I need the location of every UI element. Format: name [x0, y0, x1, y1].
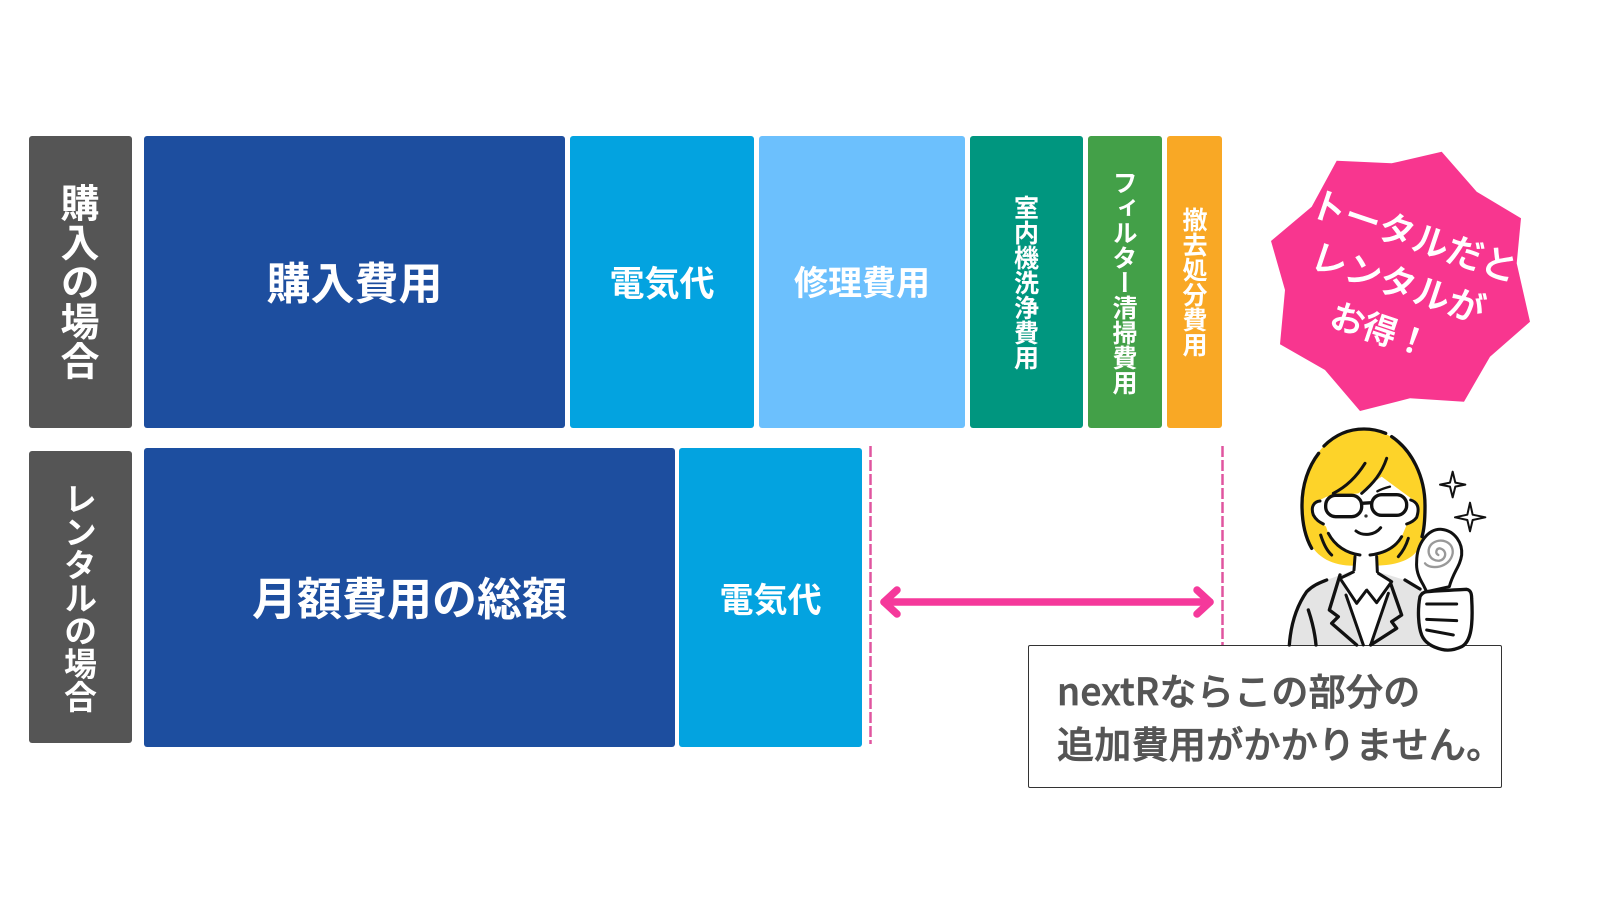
jacket	[1289, 570, 1427, 645]
row label: レンタルの場合: レンタルの場合	[56, 482, 104, 712]
badge: starburst	[1271, 152, 1530, 411]
row label: 購入の場合	[29, 136, 132, 428]
illustration: businesswoman with thumbs up	[1288, 427, 1486, 652]
dashed guide left	[869, 446, 872, 744]
segment: フィルター清掃費用	[1088, 136, 1162, 428]
badge: starburst: レンタルが	[1305, 228, 1492, 334]
segment: 電気代	[570, 136, 754, 428]
sparkles	[1440, 472, 1485, 531]
segment: 撤去処分費用: 撤去処分費用	[1177, 207, 1213, 357]
segment: 購入費用: 購入費用	[266, 248, 442, 312]
row label: レンタルの場合	[29, 451, 132, 743]
badge: starburst: お得！	[1325, 288, 1437, 367]
face and neck	[1312, 458, 1419, 589]
callout box: nextRならこの部分の	[1057, 662, 1421, 716]
segment: 修理費用	[759, 136, 965, 428]
hair	[1302, 429, 1425, 566]
badge: starburst: トータルだと	[1304, 175, 1525, 293]
segment: フィルター清掃費用: フィルター清掃費用	[1107, 170, 1143, 394]
segment: 電気代: 電気代	[609, 256, 714, 307]
segment: 室内機洗浄費用	[970, 136, 1083, 428]
segment: 修理費用: 修理費用	[794, 256, 930, 305]
row label: 購入の場合: 購入の場合	[52, 183, 108, 381]
segment: 月額費用の総額	[144, 448, 675, 747]
dashed guide right	[1221, 446, 1224, 645]
hand with thumb	[1417, 529, 1472, 650]
callout box	[1028, 645, 1502, 788]
segment: 電気代 (rental)	[679, 448, 862, 747]
arrow: savings double arrow	[880, 586, 1214, 618]
segment: 月額費用の総額: 月額費用の総額	[252, 562, 567, 628]
segment: 電気代 (rental): 電気代	[720, 572, 822, 622]
segment: 購入費用	[144, 136, 565, 428]
segment: 撤去処分費用	[1167, 136, 1222, 428]
segment: 室内機洗浄費用: 室内機洗浄費用	[1008, 194, 1044, 370]
callout box: 追加費用がかかりません。	[1057, 715, 1504, 769]
